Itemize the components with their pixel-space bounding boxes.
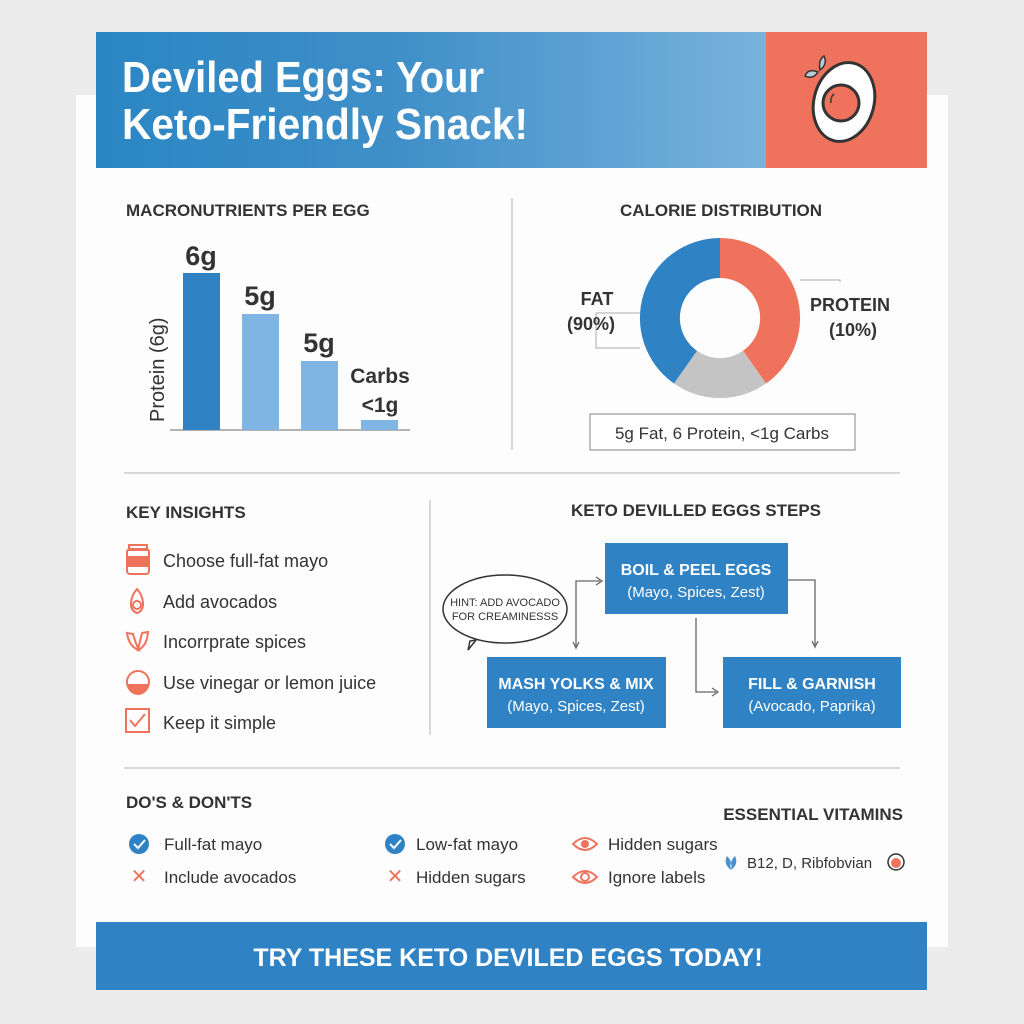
title: Deviled Eggs: Your (122, 53, 484, 102)
panel: macronutrients: MACRONUTRIENTS PER EGG (126, 201, 370, 220)
panel: steps (443, 501, 901, 728)
panel: dos and donts: Hidden sugars (608, 835, 718, 854)
header banner: Keto-Friendly Snack! (122, 100, 528, 149)
step: boil: (Mayo, Spices, Zest) (627, 584, 765, 601)
panel: macronutrients: 6g (185, 241, 217, 271)
hint callout: FOR CREAMINESSS (452, 611, 558, 623)
panel: dos and donts: Ignore labels (608, 868, 705, 887)
step: boil: BOIL & PEEL EGGS (621, 562, 772, 579)
panel: calorie distribution: (10%) (829, 320, 877, 340)
footer banner (96, 922, 927, 990)
card background (76, 95, 948, 947)
step: boil (605, 543, 788, 614)
arrows (573, 577, 818, 696)
hint callout (443, 575, 567, 650)
panel: calorie distribution: FAT (581, 289, 613, 309)
panel: dos and donts: ✕ (131, 866, 147, 888)
step: mash (487, 657, 666, 728)
panel: dos and donts: Hidden sugars (416, 868, 526, 887)
panel: calorie distribution: PROTEIN (810, 295, 890, 315)
panel: macronutrients: 5g (244, 281, 276, 311)
step: fill (723, 657, 901, 728)
icon: avocado (131, 589, 143, 613)
header banner (96, 32, 927, 168)
panel: dos and donts (126, 793, 718, 888)
icon: egg (805, 56, 883, 148)
panel: key insights (126, 503, 376, 733)
step: mash: MASH YOLKS & MIX (498, 676, 654, 693)
step: mash: (Mayo, Spices, Zest) (507, 698, 645, 715)
icon: checkbox (126, 709, 149, 732)
panel: calorie distribution: (90%) (567, 314, 615, 334)
panel: key insights: KEY INSIGHTS (126, 503, 246, 522)
panel: key insights: Add avocados (163, 592, 277, 612)
panel: macronutrients: Carbs (350, 365, 410, 388)
step: fill: (Avocado, Paprika) (748, 698, 876, 715)
panel: dos and donts: DO'S & DON'TS (126, 793, 252, 812)
panel: essential vitamins (723, 805, 904, 872)
panel: essential vitamins: ESSENTIAL VITAMINS (723, 805, 903, 824)
panel: steps: KETO DEVILLED EGGS STEPS (571, 501, 821, 520)
panel: calorie distribution: CALORIE DISTRIBUTION (620, 201, 822, 220)
panel: key insights: Incorrprate spices (163, 632, 306, 652)
panel: macronutrients: <1g (362, 394, 398, 417)
panel: calorie distribution (567, 201, 890, 450)
panel: key insights: Choose full-fat mayo (163, 551, 328, 571)
icon: jar (127, 545, 149, 574)
panel: macronutrients: Protein (6g) (147, 318, 169, 422)
panel: dos and donts: Low-fat mayo (416, 835, 518, 854)
donut chart (640, 238, 800, 398)
step: fill: FILL & GARNISH (748, 676, 876, 693)
footer banner: TRY THESE KETO DEVILED EGGS TODAY! (253, 944, 763, 972)
icon: bowl (127, 671, 149, 695)
panel: dos and donts: Full-fat mayo (164, 835, 262, 854)
panel: key insights: Use vinegar or lemon juice (163, 673, 376, 693)
panel: key insights: Keep it simple (163, 713, 276, 733)
panel: macronutrients: 5g (303, 328, 335, 358)
panel: calorie distribution: 5g Fat, 6 Protein, <1g Carbs (615, 424, 829, 443)
panel: dos and donts: ✕ (387, 866, 403, 888)
hint callout: HINT: ADD AVOCADO (450, 597, 560, 609)
icon: chili (127, 632, 148, 650)
panel: macronutrients (126, 201, 410, 430)
panel: essential vitamins: B12, D, Ribfobvian (747, 855, 872, 872)
panel: dos and donts: Include avocados (164, 868, 296, 887)
